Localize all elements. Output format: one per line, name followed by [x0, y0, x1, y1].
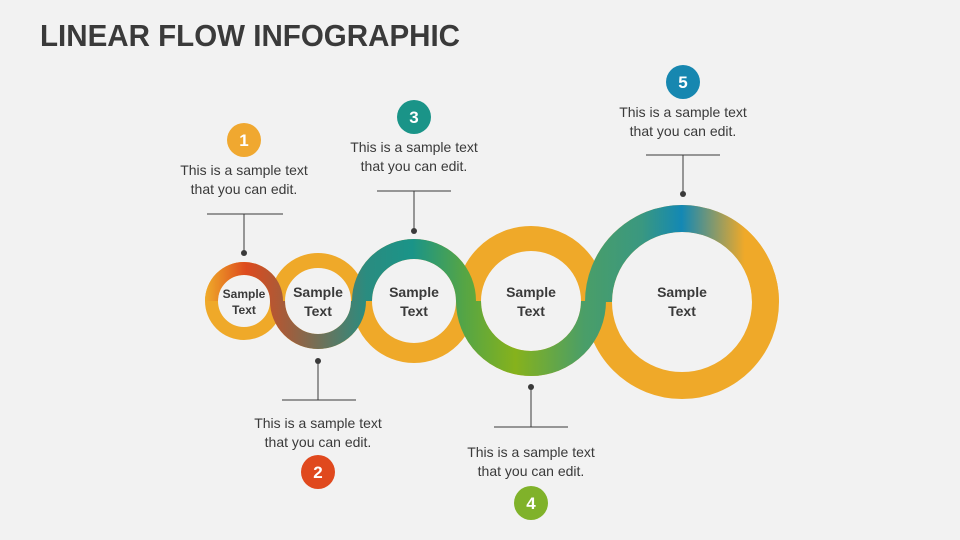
callout 2: that you can edit.: [265, 434, 371, 450]
callout 2: 2: [313, 463, 323, 482]
callout 1: that you can edit.: [191, 181, 297, 197]
flow rings: [212, 218, 766, 386]
ring labels: Text: [304, 303, 332, 319]
ring labels: Text: [668, 303, 696, 319]
callout 2: This is a sample text: [254, 415, 382, 431]
ring labels: Text: [517, 303, 545, 319]
callout 5: 5: [678, 73, 688, 92]
callout 1: [180, 123, 308, 256]
ring labels: Sample: [506, 284, 556, 300]
callout 4: that you can edit.: [478, 463, 584, 479]
callout 4: This is a sample text: [467, 444, 595, 460]
callout 4: [467, 384, 595, 520]
callout 5: that you can edit.: [630, 123, 736, 139]
callout 1: This is a sample text: [180, 162, 308, 178]
ring labels: Sample: [223, 287, 266, 301]
callout 1: 1: [239, 131, 249, 150]
callout 4: 4: [526, 494, 536, 513]
ring labels: Sample: [293, 284, 343, 300]
ring labels: [223, 284, 707, 319]
callout 5: [619, 65, 747, 197]
ring labels: Sample: [389, 284, 439, 300]
callout 2: [254, 358, 382, 489]
callout 3: This is a sample text: [350, 139, 478, 155]
callout 5: This is a sample text: [619, 104, 747, 120]
ring labels: Sample: [657, 284, 707, 300]
title: LINEAR FLOW INFOGRAPHIC: [40, 18, 460, 53]
ring labels: Text: [400, 303, 428, 319]
ring labels: Text: [232, 303, 256, 317]
callout 3: that you can edit.: [361, 158, 467, 174]
callout 3: [350, 100, 478, 234]
callout 3: 3: [409, 108, 419, 127]
